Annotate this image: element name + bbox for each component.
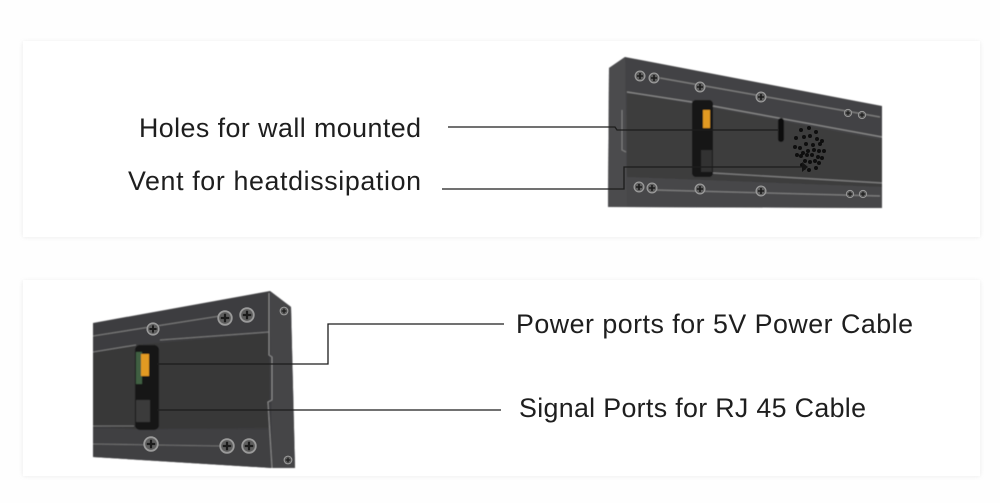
label: vent: Vent for heatdissipation [128,166,421,196]
leader line: power ports [157,324,504,364]
label: power ports: Power ports for 5V Power Cable [516,309,913,339]
label: signal ports: Signal Ports for RJ 45 Cable [519,393,866,423]
leader line: signal ports [157,409,501,411]
photo: back of display, bottom view [93,291,295,468]
icon: screws [143,307,292,464]
leader line: vent [442,162,808,189]
photo: back of display, top view [608,57,882,208]
panel: power and signal ports [23,280,980,476]
icon: screws [634,70,867,198]
panel: wall mount and vent [23,41,980,237]
leader line: wall mount holes [448,127,778,130]
icon: vent holes [793,126,826,172]
label: holes: Holes for wall mounted [139,113,421,143]
